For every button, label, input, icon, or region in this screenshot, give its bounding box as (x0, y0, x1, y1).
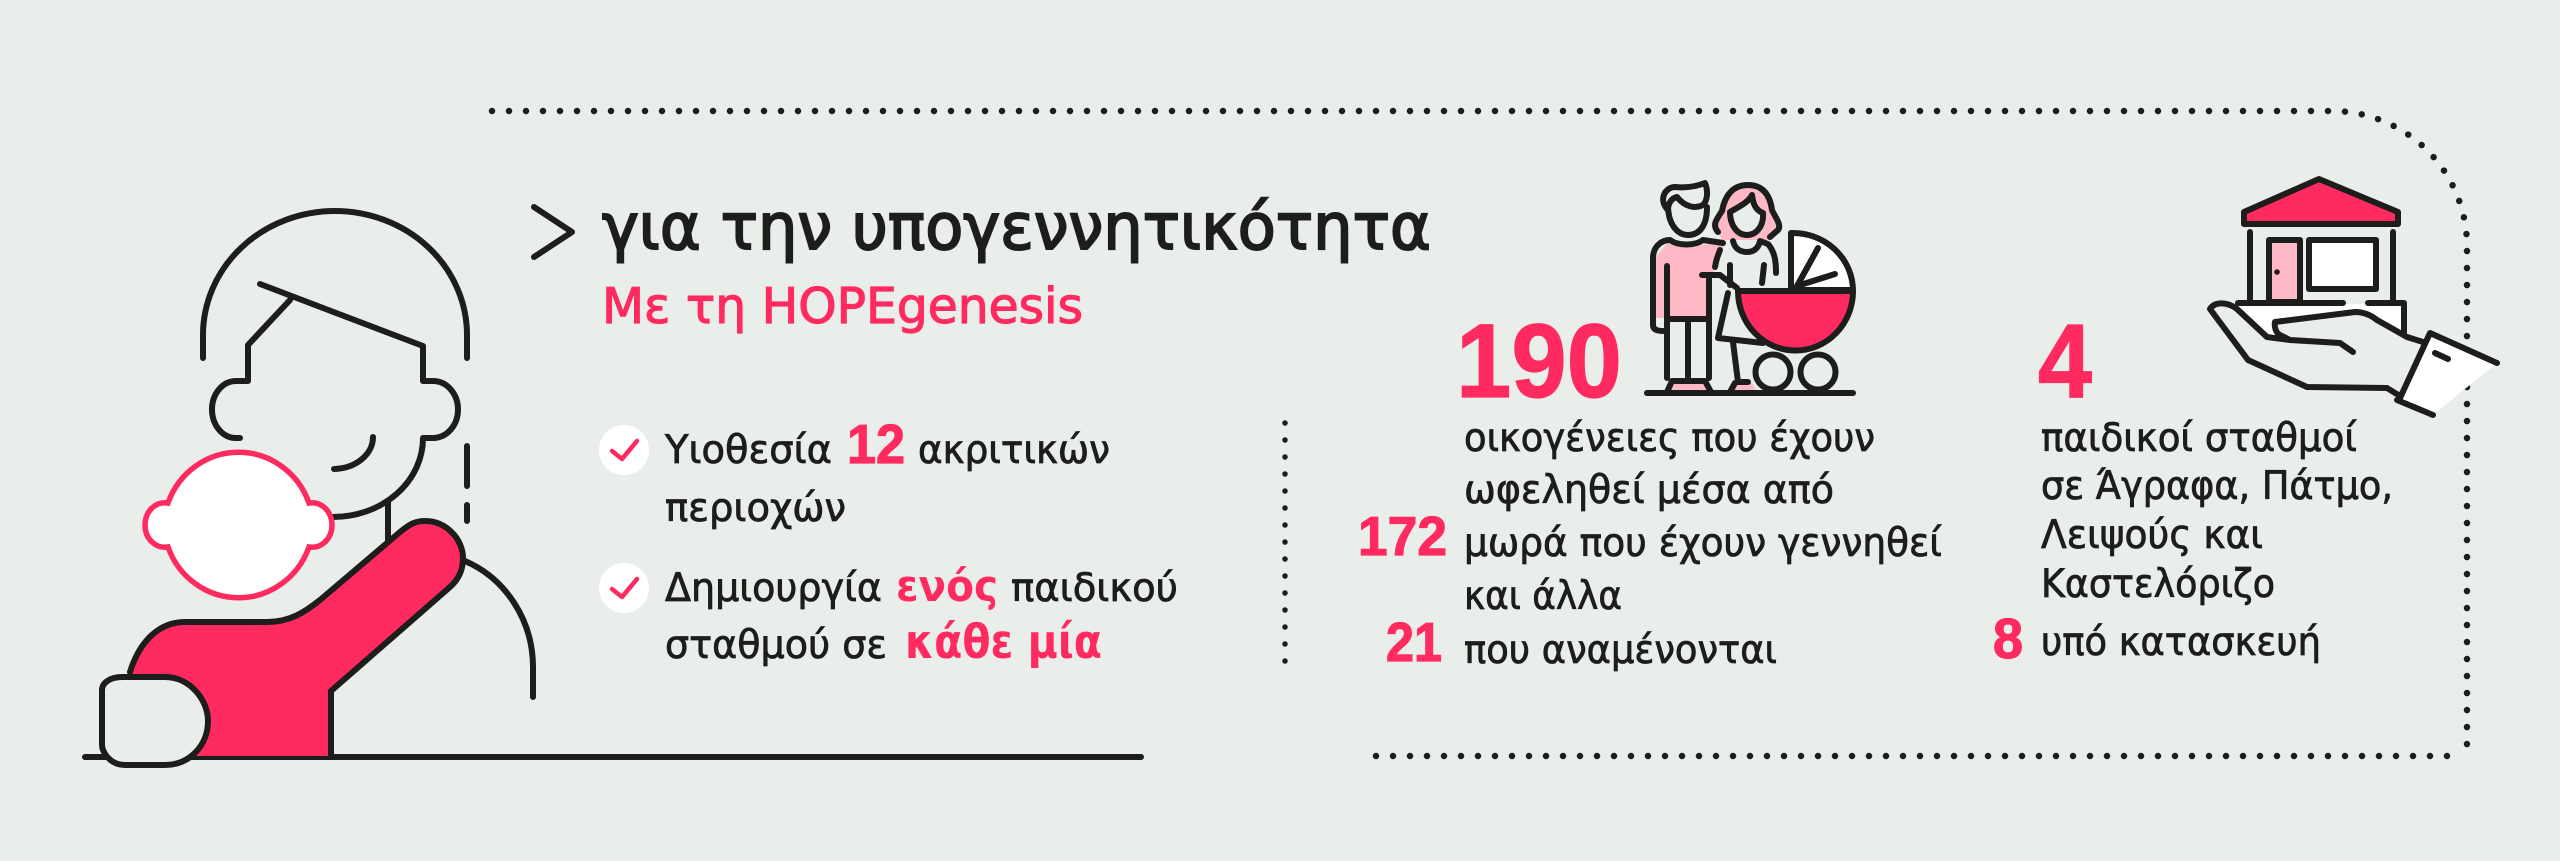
walls (2250, 232, 2393, 302)
stat: 190 families: οικογένειες που έχουν (1464, 416, 1875, 461)
roof (2244, 179, 2398, 224)
checklist item: 12 border regions (599, 413, 1110, 531)
woman's face (1730, 195, 1763, 235)
stat: 4 nurseries: υπό κατασκευή (2041, 620, 2321, 665)
mother's red arm (130, 521, 463, 756)
stat: 190 families: μωρά που έχουν γεννηθεί (1464, 521, 1942, 566)
woman (1702, 185, 1779, 392)
mother's shoulder (465, 561, 533, 697)
pram hood (1791, 233, 1853, 290)
stat: 190 families: 190 (1456, 303, 1622, 420)
sleeve (2400, 333, 2497, 415)
checklist item: 12 border regions: 12 (847, 413, 905, 475)
stat: 4 nurseries: 4 (2038, 303, 2092, 420)
title: για την υπογεννητικότητα (602, 191, 1431, 265)
wheels (1756, 354, 1836, 390)
stat: 4 nurseries (1993, 303, 2393, 671)
woman's hair (1715, 183, 1782, 240)
feet (1667, 382, 1757, 392)
checklist item: one nursery in each: κάθε μία (905, 615, 1102, 670)
man (1653, 183, 1723, 392)
pram spokes (1797, 248, 1835, 286)
pram basket (1738, 291, 1853, 351)
stat: 4 nurseries: Λειψούς και (2041, 513, 2263, 558)
baby's body (102, 677, 208, 765)
checklist item: 12 border regions: περιοχών (665, 486, 846, 531)
stat: 190 families (1358, 303, 1942, 673)
checklist item: one nursery in each: Δημιουργία (665, 566, 882, 611)
stat: 190 families: που αναμένονται (1464, 628, 1777, 673)
door (2269, 240, 2300, 302)
checklist item: 12 border regions: Υιοθεσία (664, 428, 832, 473)
checklist item: one nursery in each: ενός (896, 561, 998, 612)
checklist item: one nursery in each: παιδικού (1011, 566, 1178, 611)
man's shirt (1655, 240, 1725, 318)
stat: 4 nurseries: παιδικοί σταθμοί (2041, 416, 2357, 461)
base (2238, 304, 2404, 345)
icon: hand holding house (2210, 179, 2497, 415)
illustration: mother holding baby (85, 211, 1141, 765)
stat: 190 families: ωφεληθεί μέσα από (1464, 468, 1834, 513)
subtitle: Με τη HOPEgenesis (602, 278, 1083, 335)
mother's face (212, 284, 458, 540)
baby's head (145, 452, 332, 598)
stat: 190 families: 172 (1358, 505, 1447, 567)
stat: 190 families: 21 (1386, 611, 1442, 673)
ground line (1647, 390, 1853, 396)
icon: check (599, 563, 649, 613)
stat: 4 nurseries: σε Άγραφα, Πάτμο, (2041, 464, 2393, 509)
window (2309, 240, 2376, 289)
stat: 4 nurseries: 8 (1993, 607, 2023, 671)
icon: family with pram (1647, 183, 1853, 393)
checklist item: one nursery in each (599, 561, 1178, 670)
icon: chevron (534, 207, 572, 257)
icon: check (599, 425, 649, 475)
stat: 4 nurseries: Καστελόριζο (2041, 562, 2275, 607)
checklist item: 12 border regions: ακριτικών (918, 428, 1110, 473)
hand (2210, 303, 2423, 396)
mother's hair (203, 211, 467, 521)
checklist item: one nursery in each: σταθμού σε (665, 623, 887, 668)
stat: 190 families: και άλλα (1464, 574, 1622, 619)
